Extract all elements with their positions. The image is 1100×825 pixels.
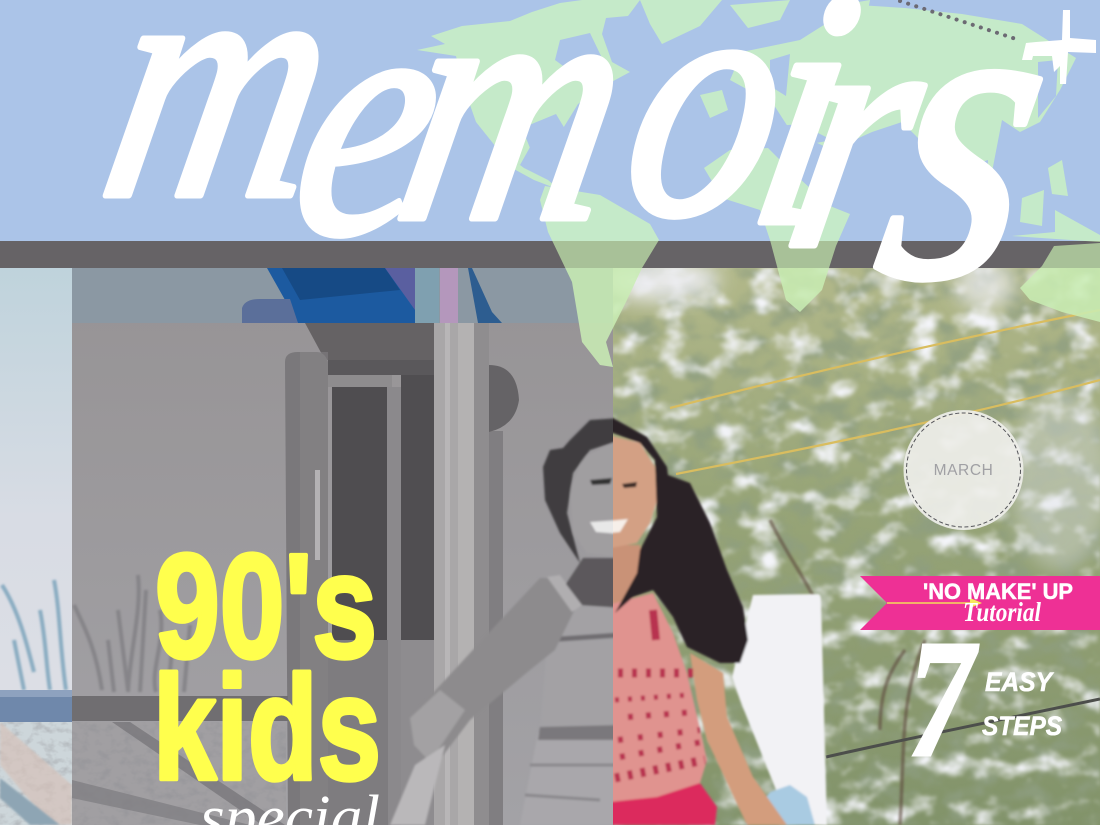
easy steps: EASY <box>985 667 1055 697</box>
month badge <box>904 410 1024 530</box>
yellow wires <box>670 310 1100 474</box>
ribbon: no make up tutorial: Tutorial <box>963 597 1041 627</box>
number 7: 7 <box>908 606 979 792</box>
dotted flight path <box>900 1 1016 39</box>
ribbon: no make up tutorial <box>860 576 1100 630</box>
photo: left strip <box>0 268 72 825</box>
headline: 90's kids: 90's <box>155 524 377 689</box>
banner background <box>0 0 1100 241</box>
girl, greyscale half <box>390 418 620 825</box>
easy steps <box>982 667 1062 741</box>
ribbon: no make up tutorial: 'NO MAKE' UP <box>923 579 1073 604</box>
photo: greyscale panel <box>72 268 613 825</box>
icon: airplane <box>1022 10 1096 84</box>
grey leg and poles <box>285 323 519 825</box>
world map on banner <box>418 0 1100 241</box>
month badge: MARCH <box>934 462 993 479</box>
girl, colour half <box>600 418 827 825</box>
world map over photo <box>565 268 1100 367</box>
horizontal rail and palms <box>72 575 288 825</box>
world map over band <box>552 241 1100 268</box>
headline: 90's kids: kids <box>153 646 381 811</box>
easy steps: STEPS <box>982 711 1062 741</box>
seas cut into map <box>522 33 1058 214</box>
band <box>0 241 1100 268</box>
photo: tree background <box>600 258 1100 825</box>
headline: 90's kids <box>153 524 381 811</box>
blue shirt area <box>72 268 613 323</box>
black wire <box>826 699 1100 757</box>
